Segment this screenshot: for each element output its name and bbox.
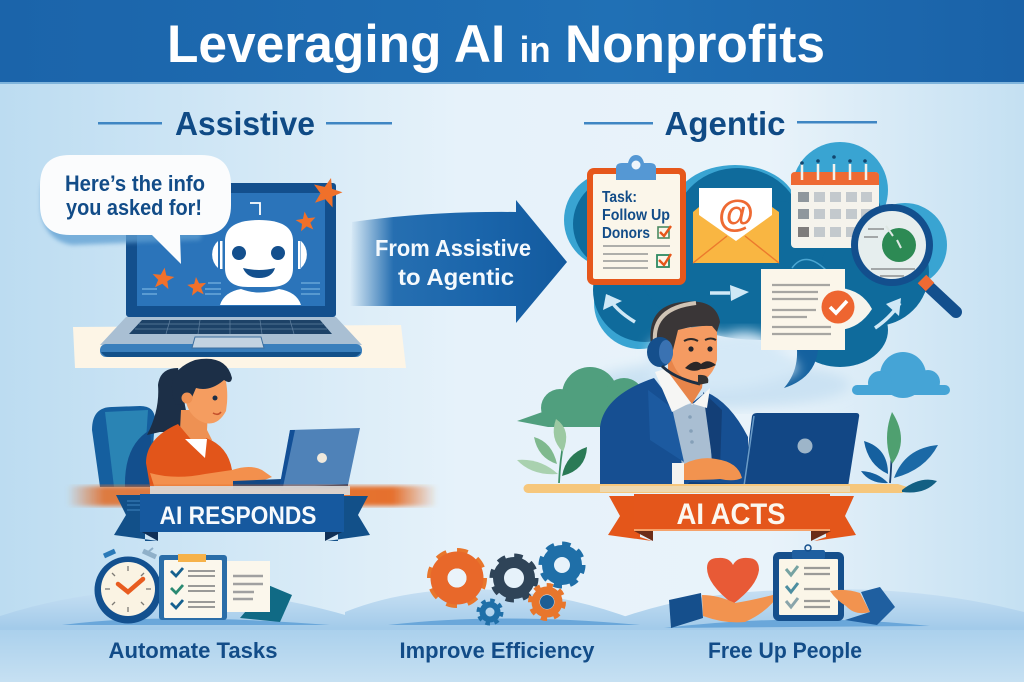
right hand [830,590,870,613]
title banner [0,0,1024,84]
workflow arrows [603,285,901,328]
heading: Assistive: Assistive [175,105,315,142]
icon: calendar [791,155,879,248]
cuff [672,463,684,487]
arrow label: From Assistive [375,235,531,261]
left hand [702,593,780,622]
clock [94,548,162,624]
hand [684,458,742,480]
stars [151,174,345,296]
person: man with headset [600,301,859,487]
neck [180,410,212,447]
face [670,324,717,384]
icon: email envelope [693,188,779,263]
bubble text: Here’s the info [65,171,205,196]
keyboard [129,320,332,334]
soft mist behind the man [590,361,850,409]
orange gear [432,552,482,604]
heart [707,558,759,604]
laptop screen [126,183,336,317]
bubble text: you asked for! [66,195,202,220]
clipboard: task [587,155,686,285]
laptop base [100,317,362,345]
neck [668,360,705,404]
ribbon: AI ACTS [608,494,856,541]
screen lines [142,283,320,294]
ponytail [147,368,190,435]
transition arrow [350,200,567,323]
icon: email envelope: @ [718,193,754,234]
right sleeve [845,587,895,625]
small blue gear [478,600,502,624]
mustache [685,361,716,371]
thought cloud [564,142,947,390]
icon: document with check [761,259,872,350]
speech bubble [40,155,231,264]
jacket [600,378,748,487]
laptop with robot [73,174,406,368]
ribbon: AI RESPONDS [114,494,370,541]
clipboard: task: Donors [602,225,650,242]
caption: Free Up People: Free Up People [708,638,862,663]
cream desk mat [73,325,406,368]
bubble text [65,171,205,220]
icon group: clock and checklist [94,548,292,624]
robot [212,203,307,305]
left sleeve [669,593,703,628]
plant left [517,419,587,483]
caption: Improve Efficiency: Improve Efficiency [400,638,595,663]
teal folder [240,585,292,622]
person: woman at laptop [92,359,360,491]
clipboard: task: Follow Up [602,207,670,224]
hair [650,301,720,352]
eyes [688,346,694,352]
title: Leveraging AI in Nonprofits [167,15,825,74]
laptop [743,413,859,487]
collar [655,368,710,412]
arm [150,467,272,489]
icon group: gears [432,545,582,624]
hair [172,359,232,405]
note page [227,561,270,612]
clipboard [159,555,227,620]
icon: magnifying glass [851,204,956,312]
small orange gear [531,586,563,618]
arrow label [375,235,531,290]
icon group: heart, hands, checklist [669,545,895,628]
headset band [655,303,696,342]
heading: Agentic: Agentic [664,105,786,142]
torso [146,424,232,486]
trackpad [192,337,264,348]
shirt neckline [185,439,207,458]
icon: blue cloud [852,352,950,398]
mic arm [662,366,700,384]
clipboard: task: Task: [602,189,637,206]
desk line [524,480,937,493]
caption: Automate Tasks: Automate Tasks [108,638,278,663]
ear cup [647,337,673,367]
bottom section hills [0,589,1024,682]
ribbon text: AI RESPONDS [160,502,316,530]
icon: green cloud [517,367,644,427]
lapel [648,390,684,462]
dark gear [493,557,535,599]
face [186,378,227,424]
arrow label: to Agentic [398,264,514,290]
plant right [861,412,938,483]
ribbon text: AI ACTS [676,498,786,531]
shirt [672,400,712,465]
orange desk band [67,486,437,506]
laptop [233,479,282,490]
blue gear [542,545,582,585]
clipboard [773,552,844,621]
chair [92,406,155,487]
